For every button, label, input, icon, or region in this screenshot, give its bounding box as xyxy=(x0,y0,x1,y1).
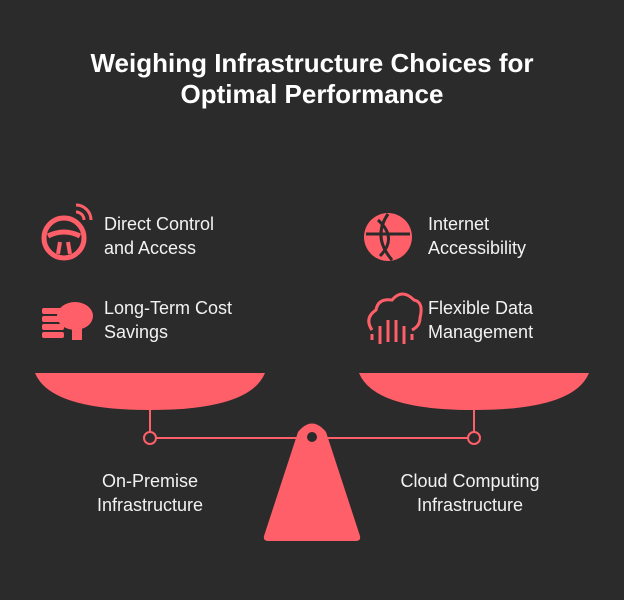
text: direct control: and Access xyxy=(104,238,196,258)
icon: piggy bank coins xyxy=(42,302,93,340)
text: direct control: Direct Control xyxy=(104,214,214,234)
title xyxy=(90,48,534,109)
text: on-premise xyxy=(97,471,203,515)
text: cost savings xyxy=(104,298,232,342)
text: cloud: Infrastructure xyxy=(417,495,523,515)
title: Optimal Performance xyxy=(180,79,443,109)
text: direct control xyxy=(104,214,214,258)
text: internet: Accessibility xyxy=(428,238,526,258)
base xyxy=(264,424,360,541)
text: data management: Management xyxy=(428,322,533,342)
text: on-premise: On-Premise xyxy=(102,471,198,491)
left pan xyxy=(35,373,265,410)
text: cloud: Cloud Computing xyxy=(400,471,540,491)
text: data management: Flexible Data xyxy=(428,298,533,318)
beam xyxy=(144,410,480,444)
text: internet xyxy=(428,214,526,258)
icon: cloud data xyxy=(369,294,421,344)
text: on-premise: Infrastructure xyxy=(97,495,203,515)
text: cloud xyxy=(400,471,540,515)
icon: steering wheel xyxy=(44,205,91,258)
icon: globe xyxy=(364,213,412,261)
text: internet: Internet xyxy=(428,214,489,234)
right pan xyxy=(359,373,589,410)
text: data management xyxy=(428,298,533,342)
title: Weighing Infrastructure Choices for xyxy=(90,48,534,78)
text: cost savings: Long-Term Cost xyxy=(104,298,232,318)
text: cost savings: Savings xyxy=(104,322,168,342)
